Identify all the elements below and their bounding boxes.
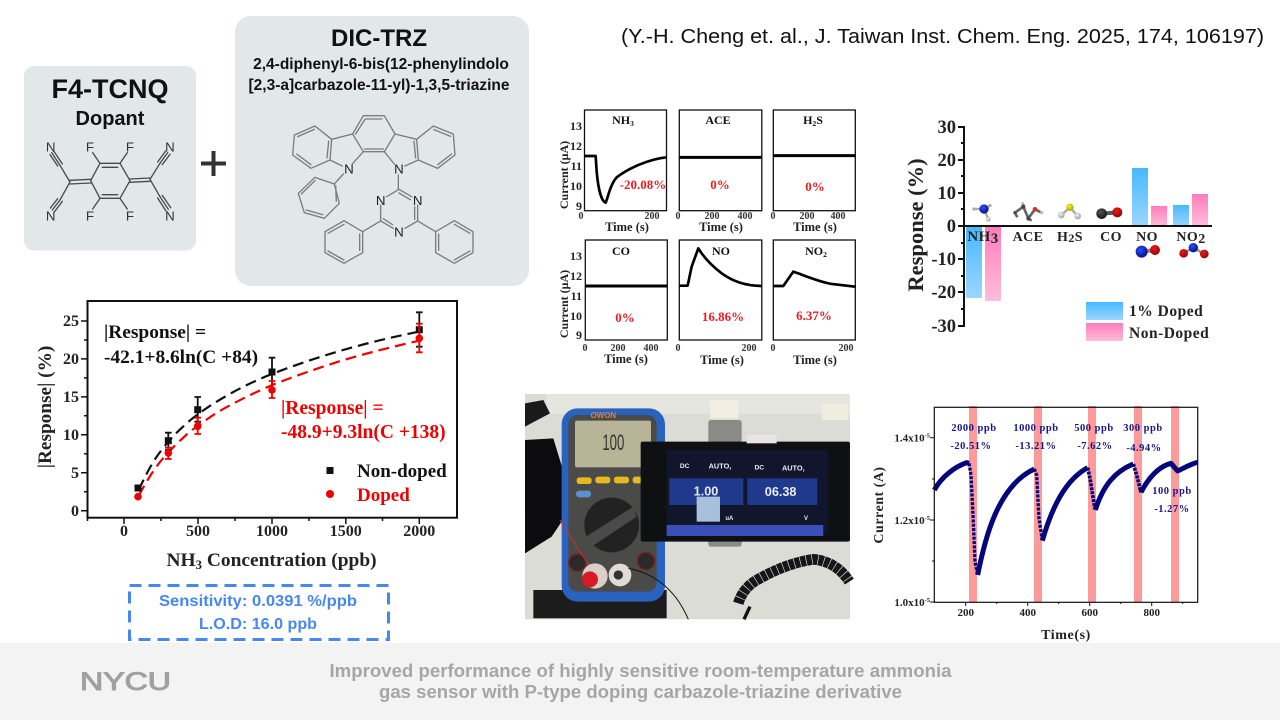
y tick labels: 1.2x10 (894, 515, 925, 527)
y tick labels: 10 (63, 427, 79, 444)
y axis title: Response (%) (903, 158, 928, 292)
x axis titles: Time (s) (793, 353, 837, 367)
x tick labels: 800 (1143, 607, 1160, 619)
x tick labels: 200 (610, 343, 626, 354)
y tick labels (931, 118, 956, 337)
y tick labels: 1.0x10 (894, 597, 925, 609)
x tick labels: 0 (582, 343, 588, 354)
photo: multimeter and phone readout: AUTO, (782, 463, 805, 472)
x tick labels: 1000 (256, 523, 288, 540)
molecule: F4-TCNQ structure: N (46, 140, 55, 155)
callout: sensitivity and LOD: Sensitivity: 0.0391 %/ppb (159, 593, 357, 610)
x tick labels: 0 (120, 523, 128, 540)
concentration labels: -20.51% (950, 441, 992, 452)
gas names: S (816, 113, 823, 127)
molecule: F4-TCNQ structure: N (165, 208, 175, 223)
y tick labels: 10 (938, 184, 956, 204)
x tick labels (120, 523, 435, 540)
y axis titles (557, 141, 571, 338)
x tick labels: 400 (830, 211, 846, 222)
gas labels (967, 229, 1206, 247)
concentration labels: 1000 ppb (1013, 423, 1059, 434)
molecule icons (972, 202, 1209, 258)
data: non-doped (134, 312, 423, 492)
x tick labels: 0 (770, 343, 776, 354)
molecule: F4-TCNQ structure: N (165, 140, 175, 155)
concentration labels: -1.27% (1154, 504, 1190, 515)
concentration labels: 100 ppb (1152, 486, 1192, 497)
response values: 6.37% (796, 308, 832, 323)
plus sign (201, 151, 226, 176)
molecule: DIC-TRZ structure: N (344, 161, 354, 176)
y tick labels: 12 (570, 269, 582, 283)
molecule: DIC-TRZ structure: N (413, 193, 422, 208)
logo: NYCU: NYCU (80, 668, 171, 696)
gas names: 3 (630, 119, 634, 128)
gas names: NH (612, 113, 630, 127)
equation: doped: |Response| = (281, 398, 384, 419)
chemical name: [2,3-a]carbazole-11-yl)-1,3,5-triazine (248, 77, 510, 94)
panel: selectivity current traces (557, 110, 855, 367)
y tick labels: 1.4x10 (894, 432, 925, 444)
gas names: NO (805, 244, 823, 258)
equation: doped: -48.9+9.3ln(C +138) (281, 422, 446, 443)
y tick labels: 9 (576, 199, 582, 213)
concentration labels: -4.94% (1126, 443, 1162, 454)
chart: response bar chart (903, 118, 1212, 342)
exposure bands (969, 406, 1179, 602)
chart: concentration vs response (35, 301, 457, 572)
photo: multimeter and phone readout: uA (725, 516, 734, 522)
legend: Non-doped (357, 461, 447, 482)
x tick labels: 0 (676, 343, 680, 354)
x tick labels (957, 607, 1160, 619)
molecule: F4-TCNQ structure: F (126, 208, 134, 223)
gas names: CO (612, 244, 630, 258)
x axis titles: Time (s) (604, 352, 648, 366)
footer title: Improved performance of highly sensitive room-temperature ammonia (329, 661, 953, 681)
trace curves (584, 156, 855, 287)
y axis title: Current (A) (872, 466, 887, 544)
gas names (612, 113, 827, 259)
x axis title: Concentration (ppb) (202, 550, 377, 571)
fit line: doped (139, 341, 419, 496)
gas names: NO (712, 244, 730, 258)
photo: multimeter and phone readout: AUTO, (709, 462, 731, 471)
equation: non-doped: |Response| = (104, 322, 206, 343)
heading: DIC-TRZ: DIC-TRZ (331, 25, 427, 52)
molecule: DIC-TRZ structure: N (394, 225, 404, 240)
heading: F4-TCNQ: F4-TCNQ (52, 74, 168, 104)
y tick labels (570, 119, 582, 342)
equation: non-doped: -42.1+8.6ln(C +84) (104, 347, 258, 368)
x tick labels: 1500 (330, 523, 362, 540)
y tick labels: 11 (571, 159, 582, 173)
y tick labels: 9 (576, 328, 582, 342)
molecule: F4-TCNQ structure: F (86, 208, 94, 223)
gas labels: ACE (1013, 230, 1043, 245)
chart: dynamic NH3 response (872, 406, 1198, 643)
x tick labels: 200 (838, 343, 854, 354)
y tick labels: 12 (570, 139, 582, 153)
x axis title: Time(s) (1041, 628, 1091, 643)
plot frame (934, 407, 1198, 602)
y tick labels: 25 (63, 313, 79, 330)
molecule: F4-TCNQ structure: F (126, 140, 134, 155)
y tick labels: 13 (570, 249, 582, 263)
molecule: F4-TCNQ structure: N (46, 208, 55, 223)
y tick labels: 5 (71, 465, 79, 482)
callout: sensitivity and LOD: L.O.D: 16.0 ppb (199, 616, 317, 633)
citation: (Y.-H. Cheng et. al., J. Taiwan Inst. Chem. Eng. 2025, 174, 106197) (621, 25, 1264, 48)
bars (966, 168, 1208, 301)
y tick labels: 20 (938, 151, 956, 171)
response values: 16.86% (702, 309, 744, 324)
y tick labels: -5 (925, 432, 931, 440)
trace frames (584, 110, 855, 340)
photo: multimeter and phone readout (525, 394, 850, 619)
gas labels: NO (1176, 230, 1198, 245)
x tick labels: 0 (676, 211, 680, 222)
x axis titles: Time (s) (605, 220, 649, 234)
y tick labels (63, 313, 79, 520)
y tick labels: 13 (570, 119, 582, 133)
x axis titles (604, 220, 837, 367)
concentration labels: 300 ppb (1123, 423, 1163, 434)
x tick labels: 200 (704, 211, 720, 222)
x tick labels: 200 (644, 211, 660, 222)
x axis titles: Time (s) (699, 220, 743, 234)
gas labels: 3 (991, 231, 999, 247)
x tick labels: 200 (957, 607, 974, 619)
y axis title: |Response| (%) (35, 346, 56, 468)
legend: Doped (357, 485, 410, 506)
response values: 0% (805, 179, 825, 194)
y tick labels: -30 (931, 317, 956, 337)
gas labels: H (1057, 230, 1068, 245)
molecule: DIC-TRZ structure: N (394, 161, 404, 176)
gas names: ACE (705, 113, 731, 127)
x axis title: 3 (196, 557, 203, 572)
y tick labels: -5 (925, 515, 931, 522)
footer band (0, 643, 1280, 720)
x tick labels: 200 (800, 211, 814, 222)
response values (615, 177, 832, 325)
photo: multimeter and phone readout: 06.38 (765, 485, 796, 499)
legend (326, 461, 447, 506)
x axis titles: Time (s) (700, 353, 744, 367)
concentration labels: 2000 ppb (951, 423, 997, 434)
legend: Non-Doped (1129, 325, 1209, 342)
gas names: H (803, 113, 812, 127)
concentration labels: -7.62% (1077, 441, 1113, 452)
subheading: Dopant: Dopant (76, 108, 145, 130)
y tick labels (894, 432, 931, 609)
chemical name: 2,4-diphenyl-6-bis(12-phenylindolo (253, 56, 509, 73)
data: doped (134, 324, 423, 501)
x tick labels: 600 (1081, 607, 1098, 619)
response values: 0% (710, 177, 730, 192)
concentration labels: 500 ppb (1074, 423, 1114, 434)
x tick labels: 400 (1019, 607, 1036, 619)
y tick labels: -5 (925, 597, 931, 604)
legend (1086, 302, 1209, 342)
panel: DIC-TRZ (235, 16, 529, 286)
photo: multimeter and phone readout: 100 (602, 430, 624, 455)
callout: sensitivity and LOD (130, 586, 388, 640)
molecule: DIC-TRZ structure: N (376, 193, 385, 208)
gas names: 2 (812, 119, 816, 128)
y tick labels: 11 (571, 289, 582, 303)
gas labels: 2 (1068, 231, 1075, 245)
molecule: F4-TCNQ structure (46, 140, 175, 223)
photo: multimeter and phone readout: DC (680, 463, 690, 470)
fit line: non-doped (139, 332, 419, 490)
photo: multimeter and phone readout: DC (754, 464, 764, 471)
panel: F4-TCNQ dopant (24, 66, 196, 250)
x tick labels: 400 (644, 343, 658, 354)
x tick labels (578, 211, 854, 354)
y tick labels: 10 (570, 309, 582, 323)
footer title: gas sensor with P-type doping carbazole-triazine derivative (379, 682, 902, 702)
x tick labels: 400 (738, 211, 752, 222)
y tick labels: 30 (938, 118, 956, 138)
concentration labels: -13.21% (1015, 441, 1057, 452)
x tick labels: 0 (770, 211, 776, 222)
current curve (934, 462, 1198, 575)
y tick labels: -20 (931, 283, 956, 303)
y tick labels: 15 (63, 389, 79, 406)
gas names: 2 (823, 250, 827, 259)
gas labels: NO (1136, 230, 1158, 245)
x tick labels: 200 (742, 343, 756, 354)
x tick labels: 2000 (403, 523, 435, 540)
y tick labels: 10 (570, 179, 582, 193)
gas labels: CO (1100, 230, 1122, 245)
plot frame (88, 301, 457, 518)
concentration labels (950, 423, 1192, 515)
photo: multimeter and phone readout: 1.00 (694, 484, 718, 498)
legend: 1% Doped (1129, 303, 1203, 320)
y tick labels: 0 (71, 503, 79, 520)
gas labels: 2 (1198, 232, 1206, 247)
photo: multimeter and phone readout: V (804, 516, 808, 522)
photo: multimeter and phone readout: OWON (590, 411, 616, 420)
molecule: DIC-TRZ structure (293, 116, 473, 263)
y axis titles: Current (μA) (557, 141, 571, 209)
gas labels: NH (967, 229, 991, 245)
x axis title: NH (166, 550, 196, 571)
response values: -20.08% (620, 177, 666, 192)
response values: 0% (615, 310, 635, 325)
molecule: F4-TCNQ structure: F (86, 140, 94, 155)
x tick labels: 0 (578, 211, 584, 222)
x axis titles: Time (s) (793, 220, 837, 234)
y tick labels: -10 (931, 250, 956, 270)
y tick labels: 20 (63, 351, 79, 368)
x tick labels: 500 (186, 523, 210, 540)
y tick labels: 0 (947, 217, 956, 237)
y axis titles: Current (μA) (557, 270, 571, 338)
gas labels: S (1075, 230, 1083, 245)
